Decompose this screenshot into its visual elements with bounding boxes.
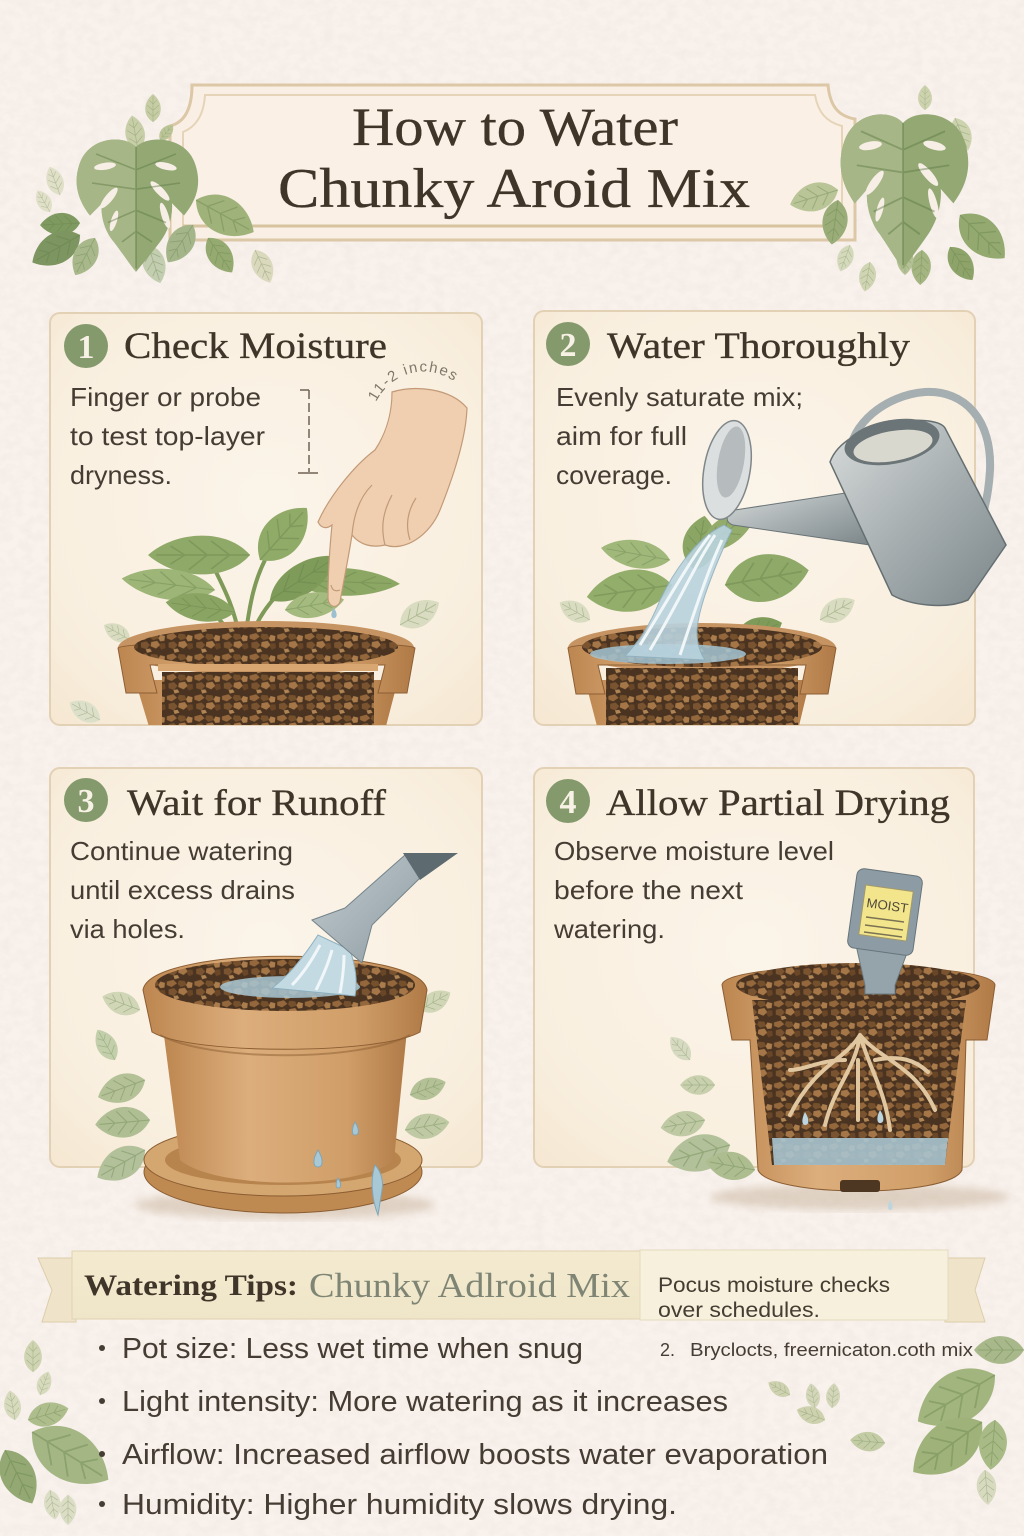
tips list: Humidity: Higher humidity slows drying. bbox=[122, 1489, 677, 1521]
body text 3: until excess drains bbox=[70, 875, 295, 905]
step 1 badge: 1 bbox=[78, 329, 94, 366]
potted plant 3 illustration bbox=[89, 853, 458, 1219]
body text 2: Evenly saturate mix; bbox=[556, 382, 803, 412]
title text: How to Water bbox=[352, 97, 678, 157]
hand bbox=[318, 389, 467, 606]
heading 4: Allow Partial Drying bbox=[606, 783, 950, 824]
roots bbox=[790, 1035, 935, 1130]
panel 2: water thoroughly bbox=[0, 311, 1024, 1525]
ribbon heading: Chunky Adlroid Mix bbox=[309, 1266, 631, 1305]
tips list bbox=[99, 1333, 828, 1521]
foliage: top right bbox=[786, 85, 1017, 293]
watering can bbox=[696, 392, 1006, 605]
cutaway pot 4 bbox=[722, 963, 995, 1192]
ground shadow 4 bbox=[710, 1184, 1010, 1210]
step 2 badge bbox=[546, 322, 590, 366]
depth scale bbox=[298, 390, 318, 473]
body text 4: watering. bbox=[553, 914, 665, 944]
body text 2: coverage. bbox=[556, 460, 672, 490]
runoff droplets bbox=[314, 1122, 383, 1215]
body text 2: aim for full bbox=[556, 421, 687, 451]
ribbon heading bbox=[84, 1266, 631, 1305]
pot 1 bbox=[118, 621, 415, 730]
title text bbox=[278, 97, 750, 220]
body text 3: via holes. bbox=[70, 914, 185, 944]
panel 1: check moisture bbox=[49, 312, 483, 726]
spout and water bbox=[272, 853, 458, 996]
ribbon heading: Watering Tips: bbox=[84, 1269, 298, 1302]
background foliage 2 bbox=[560, 598, 854, 623]
body text 1 bbox=[70, 382, 265, 490]
drips bbox=[802, 1110, 893, 1210]
heading 2: Water Thoroughly bbox=[607, 326, 911, 367]
foliage around pot 3 bbox=[89, 984, 455, 1191]
plant 1 bbox=[122, 508, 400, 622]
potted plant 4 illustration bbox=[659, 868, 1010, 1210]
moisture meter bbox=[847, 868, 923, 994]
pot 2 bbox=[568, 623, 836, 730]
side note item 2: 2. bbox=[660, 1340, 675, 1360]
tips list: Light intensity: More watering as it increases bbox=[122, 1386, 728, 1418]
pot 3 bbox=[143, 956, 427, 1182]
ribbon side note bbox=[658, 1274, 890, 1322]
ground shadow 3 bbox=[135, 1191, 435, 1219]
saucer bbox=[144, 1124, 422, 1213]
potted plant 2 bbox=[560, 516, 854, 725]
tips ribbon bbox=[38, 1250, 985, 1322]
title text: Chunky Aroid Mix bbox=[278, 158, 750, 220]
ribbon side note: Pocus moisture checks bbox=[658, 1274, 890, 1297]
foliage around pot 4 bbox=[659, 1032, 757, 1184]
ribbon side note: over schedules. bbox=[658, 1299, 820, 1322]
body text 1: dryness. bbox=[70, 460, 172, 490]
side note item 2: Bryclocts, freernicaton.coth mix bbox=[690, 1340, 973, 1360]
depth label: 11-2 inches bbox=[369, 361, 456, 401]
panel 3: wait for runoff bbox=[50, 768, 482, 1167]
moisture meter: MOIST bbox=[866, 895, 909, 916]
step 4 badge bbox=[546, 779, 590, 823]
step 2 badge: 2 bbox=[560, 327, 576, 364]
background foliage 1 bbox=[70, 600, 439, 723]
body text 4: Observe moisture level bbox=[554, 836, 834, 866]
heading 1: Check Moisture bbox=[124, 326, 387, 367]
tips list: Airflow: Increased airflow boosts water evaporation bbox=[122, 1439, 828, 1471]
potted plant 1 bbox=[70, 508, 439, 725]
water droplet bbox=[331, 608, 337, 618]
foliage: bottom right bbox=[765, 1336, 1024, 1506]
title banner bbox=[170, 85, 855, 240]
body text 1: Finger or probe bbox=[70, 382, 261, 412]
foliage: bottom left bbox=[0, 1340, 122, 1525]
foliage: top left bbox=[25, 94, 279, 287]
panel 4: allow partial drying bbox=[534, 768, 974, 1167]
body text 1: to test top-layer bbox=[70, 421, 265, 451]
step 3 badge bbox=[64, 778, 108, 822]
body text 4 bbox=[553, 836, 834, 944]
body text 3 bbox=[70, 836, 295, 944]
step 1 badge bbox=[64, 324, 108, 368]
step 3 badge: 3 bbox=[78, 783, 94, 820]
body text 3: Continue watering bbox=[70, 836, 293, 866]
tips list: Pot size: Less wet time when snug bbox=[122, 1333, 583, 1365]
plant 2 bbox=[587, 516, 809, 628]
body text 2 bbox=[556, 382, 803, 490]
water stream bbox=[625, 525, 732, 660]
body text 4: before the next bbox=[554, 875, 744, 905]
heading 3: Wait for Runoff bbox=[127, 783, 387, 824]
step 4 badge: 4 bbox=[560, 784, 576, 821]
